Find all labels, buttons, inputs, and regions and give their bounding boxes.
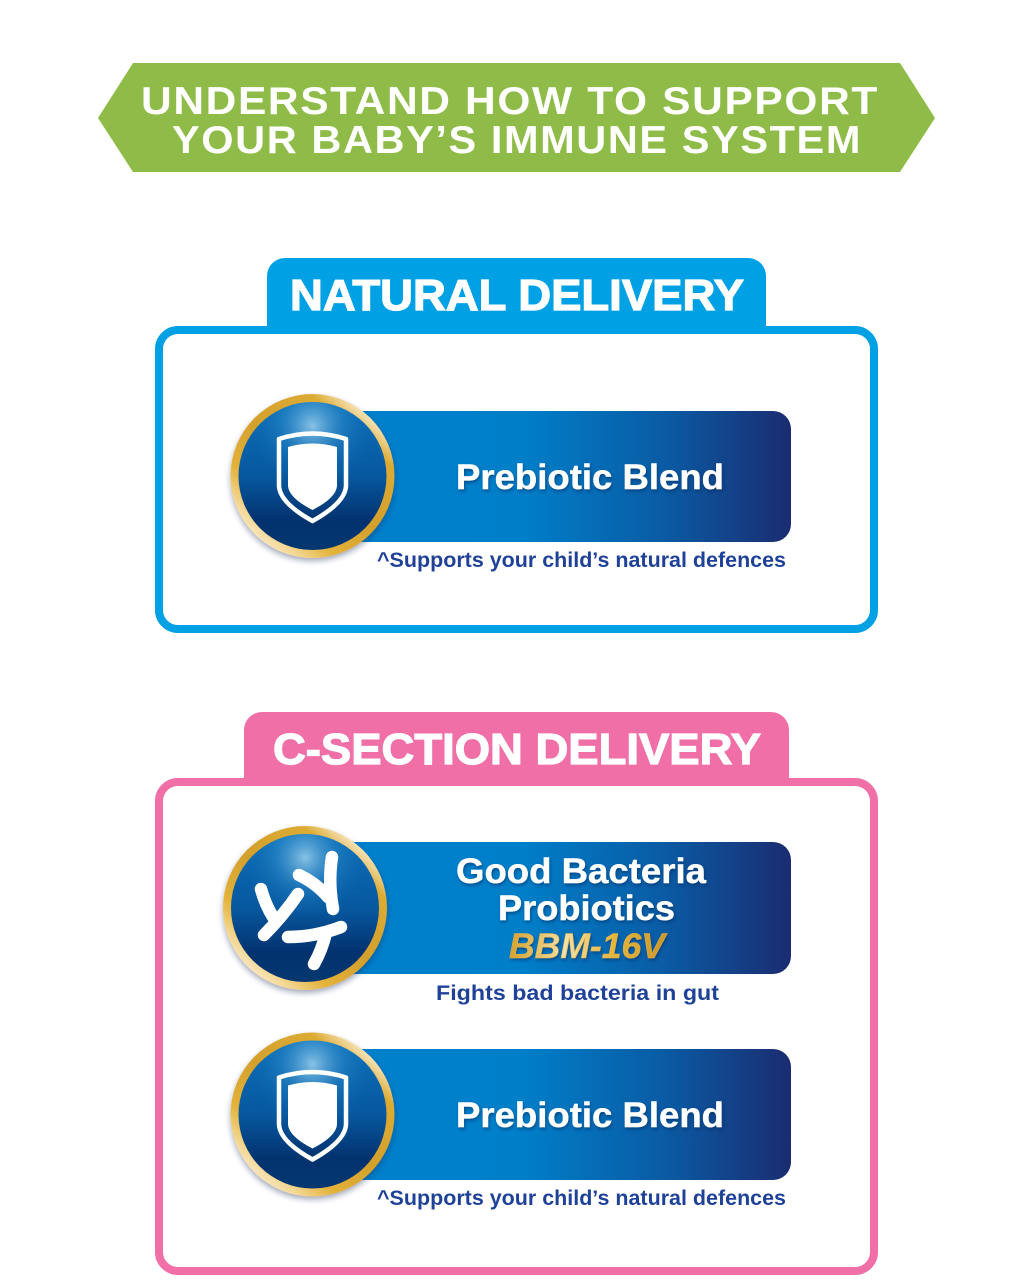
- panel: c-section delivery: [159, 712, 874, 1271]
- caption: supports natural defences: ^Supports your child’s natural defences: [377, 1186, 786, 1210]
- title banner: YOUR BABY’S IMMUNE SYSTEM: [172, 119, 862, 162]
- panel: natural delivery: [159, 258, 874, 629]
- bar: prebiotic blend: Prebiotic Blend: [456, 458, 724, 497]
- tab: c-section delivery: [244, 712, 789, 786]
- bar: good bacteria probiotics: Good Bacteria: [456, 852, 707, 891]
- title banner: [98, 63, 935, 172]
- bar: prebiotic blend: Prebiotic Blend: [456, 1096, 724, 1135]
- tab: natural delivery: [267, 258, 766, 334]
- icon: bacteria medal: [223, 826, 387, 990]
- bar: good bacteria probiotics: Probiotics: [498, 889, 675, 928]
- panel frame: [159, 782, 874, 1271]
- tab: natural delivery: NATURAL DELIVERY: [290, 271, 744, 320]
- caption: fights bad bacteria: Fights bad bacteria in gut: [436, 981, 719, 1005]
- bar: good bacteria probiotics: [340, 842, 791, 974]
- icon: shield medal: [230, 1032, 394, 1196]
- bar: good bacteria probiotics: BBM-16V: [509, 927, 668, 966]
- bar: prebiotic blend: [340, 1049, 791, 1180]
- icon: shield medal: [230, 394, 394, 558]
- tab: c-section delivery: C-SECTION DELIVERY: [273, 725, 761, 774]
- panel frame: [159, 330, 874, 629]
- bar: prebiotic blend: [340, 411, 791, 542]
- title banner: UNDERSTAND HOW TO SUPPORT: [141, 80, 879, 123]
- caption: supports natural defences: ^Supports your child’s natural defences: [377, 548, 786, 572]
